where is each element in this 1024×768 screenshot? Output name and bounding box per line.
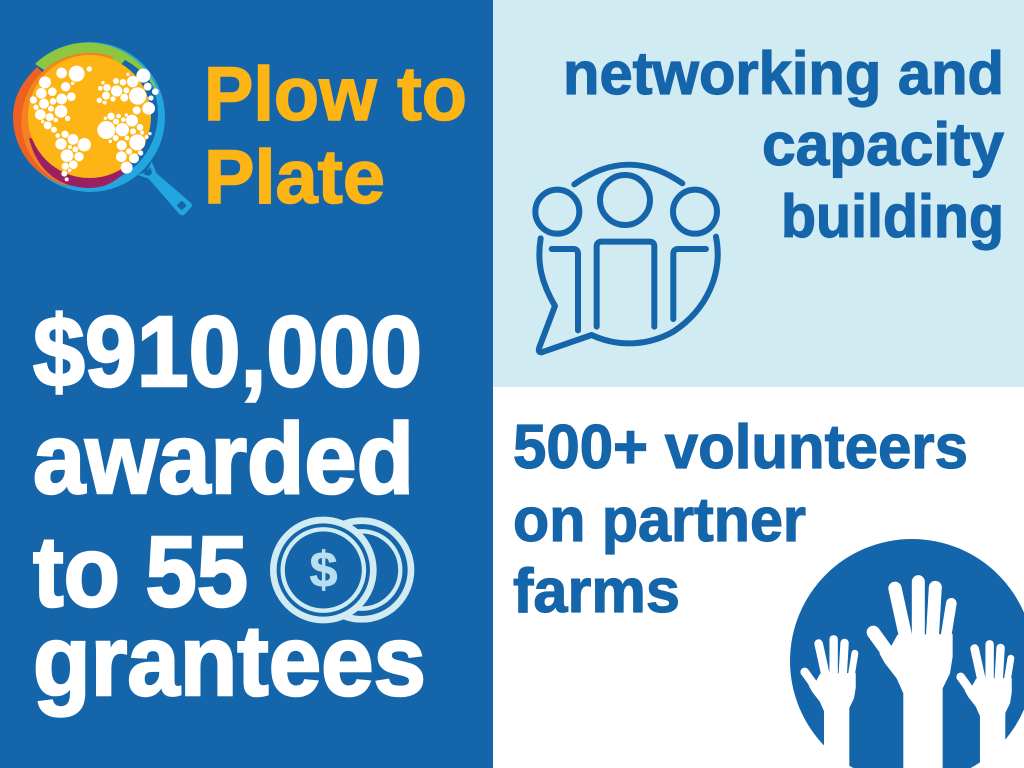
right person head — [673, 190, 717, 234]
green arc — [35, 43, 159, 100]
continents made of white dots — [30, 66, 158, 181]
heading: volunteers on partner farms: on partner — [513, 486, 806, 555]
magnifier handle — [137, 162, 192, 215]
panel: volunteers background — [493, 387, 1024, 768]
heading: volunteers on partner farms — [513, 413, 968, 626]
title: Plow to Plate: Plow to — [204, 52, 467, 137]
center person head — [600, 175, 650, 225]
red-orange crescent — [13, 67, 90, 186]
heading: volunteers on partner farms: 500+ volunteers — [513, 413, 968, 482]
yellow globe disc — [28, 55, 151, 178]
title: Plow to Plate — [204, 52, 467, 220]
orange crescent — [21, 53, 113, 185]
heading: networking and capacity building: building — [781, 183, 1004, 250]
icon: globe magnifying glass logo — [13, 42, 192, 215]
dollar sign: $ — [310, 542, 338, 598]
heading: amount awarded to grantees — [33, 296, 426, 717]
speech bubble outline — [539, 237, 718, 352]
heading: volunteers on partner farms: farms — [513, 557, 680, 626]
right person body — [673, 249, 706, 319]
left person body — [552, 249, 578, 330]
icon: three people in speech bubble — [535, 165, 718, 352]
heading: amount awarded to grantees: awarded — [33, 403, 414, 515]
magnifier inner cutout — [16, 43, 158, 185]
blue circle — [790, 539, 1024, 768]
front coin — [273, 520, 373, 620]
magnifier ring — [15, 42, 165, 192]
panel: networking background — [493, 0, 1024, 387]
icon: coins with dollar sign — [273, 520, 411, 620]
back coin — [312, 521, 411, 619]
heading: amount awarded to grantees: $910,000 — [33, 296, 422, 408]
center person body — [597, 242, 654, 327]
title: Plow to Plate: Plate — [204, 135, 385, 220]
heading: amount awarded to grantees: to 55 — [33, 516, 248, 628]
heading: amount awarded to grantees: grantees — [33, 605, 426, 717]
heading: networking and capacity building: networking and — [563, 40, 1004, 107]
heading: networking and capacity building — [563, 40, 1005, 250]
speech bubble arc top — [574, 165, 682, 184]
purple crescent — [29, 138, 125, 188]
icon: raised hands in circle — [790, 539, 1024, 768]
three raised hands — [805, 582, 1012, 768]
left person head — [535, 190, 579, 234]
panel: grant summary background — [0, 0, 493, 768]
heading: networking and capacity building: capacity — [762, 111, 1005, 178]
